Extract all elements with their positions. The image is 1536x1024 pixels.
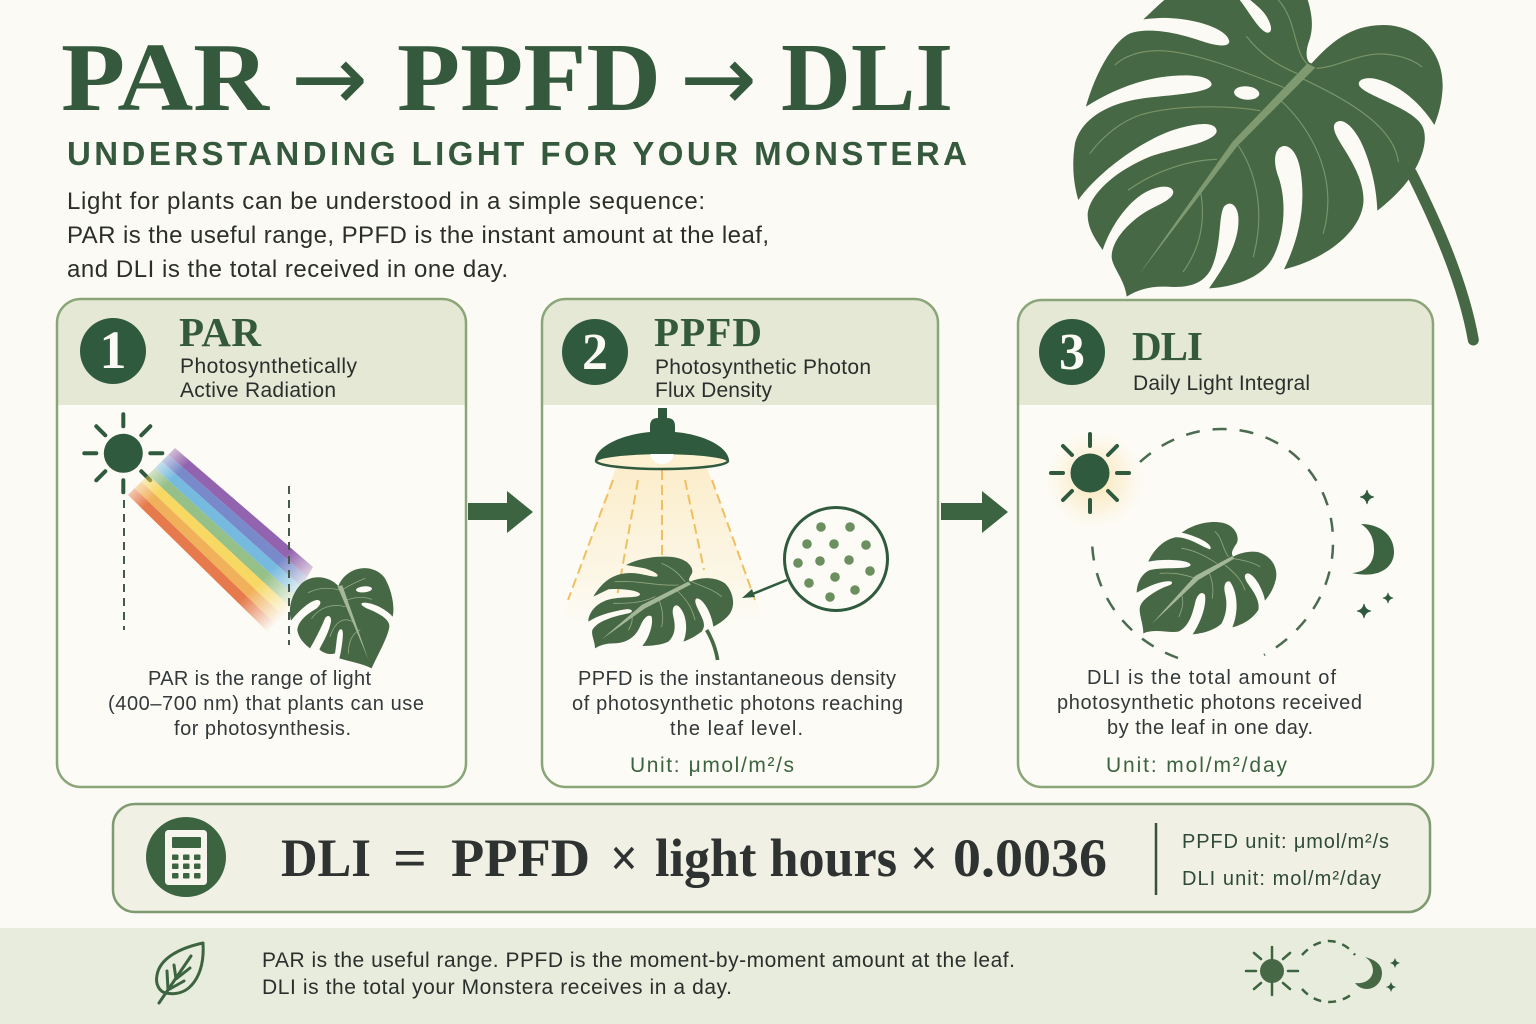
PAR full name: Active Radiation (180, 379, 336, 402)
PPFD full name: Photosynthetic Photon (655, 356, 871, 379)
icon: day-night cycle (1246, 941, 1400, 1002)
divider (1155, 823, 1157, 895)
PAR full name (180, 355, 358, 402)
icon: leaf with stem (588, 557, 733, 660)
PPFD description: of photosynthetic photons reaching (572, 693, 903, 715)
PPFD description: the leaf level. (670, 718, 803, 740)
formula text: = (393, 828, 427, 888)
formula text: light hours (655, 828, 897, 888)
intro text (67, 188, 769, 283)
DLI description: photosynthetic photons received (1057, 692, 1362, 714)
badge 3: 3 (1059, 324, 1085, 381)
callout arrow (742, 580, 787, 598)
title: PAR (61, 24, 270, 131)
PPFD header band (542, 299, 938, 405)
title: DLI (781, 24, 953, 131)
PPFD unit: Unit: μmol/m²/s (630, 754, 794, 777)
icon: outline leaf (157, 943, 203, 1003)
DLI header band (1018, 300, 1433, 405)
formula text: 0.0036 (953, 828, 1107, 888)
icon: sun (84, 414, 162, 492)
PAR description (108, 668, 424, 740)
formula text: × (610, 828, 638, 888)
arrow 2 (941, 491, 1008, 533)
footer text: DLI is the total your Monstera receives in a day. (262, 976, 732, 999)
panel: formula (113, 804, 1430, 912)
DLI description (1057, 667, 1362, 739)
light rays (568, 470, 755, 600)
icon: leaf (290, 568, 393, 668)
badge 1 (80, 318, 146, 384)
badge 2: 2 (582, 324, 608, 381)
PAR full name: Photosynthetically (180, 355, 358, 378)
icon: leaf (1137, 522, 1276, 634)
formula text (281, 828, 1107, 888)
PPFD description (572, 668, 903, 740)
sun glow (1045, 430, 1145, 530)
PPFD description: PPFD is the instantaneous density (578, 668, 896, 690)
DLI full name: Daily Light Integral (1133, 372, 1310, 395)
PAR header band (57, 299, 466, 405)
PPFD full name (655, 356, 871, 402)
footer band (0, 928, 1536, 1024)
formula text: × (910, 828, 938, 888)
title: PPFD (397, 24, 661, 131)
icon: moon (1352, 524, 1394, 575)
title: → (680, 25, 757, 132)
title: → (291, 25, 368, 132)
DLI description: by the leaf in one day. (1107, 717, 1313, 739)
unit notes: DLI unit: mol/m²/day (1182, 868, 1381, 890)
PAR description: for photosynthesis. (174, 718, 351, 740)
footer text: PAR is the useful range. PPFD is the moment-by-moment amount at the leaf. (262, 949, 1015, 972)
PPFD full name: Flux Density (655, 379, 772, 402)
magnified photons (784, 508, 888, 610)
DLI unit: Unit: mol/m²/day (1106, 754, 1288, 777)
intro text: and DLI is the total received in one day. (67, 256, 508, 283)
intro text: PAR is the useful range, PPFD is the instant amount at the leaf, (67, 222, 769, 249)
icon: sun (1051, 434, 1129, 512)
panel: DLI (1018, 300, 1433, 787)
DLI heading: DLI (1132, 323, 1203, 369)
rainbow spectrum beam (128, 448, 313, 637)
PPFD heading: PPFD (654, 309, 762, 355)
PAR heading: PAR (179, 309, 261, 355)
badge 2 (562, 319, 628, 385)
PAR description: PAR is the range of light (148, 668, 371, 690)
subtitle: UNDERSTANDING LIGHT FOR YOUR MONSTERA (67, 135, 967, 172)
range markers (124, 486, 289, 645)
daily path (1092, 429, 1333, 658)
formula text: PPFD (451, 828, 590, 888)
formula text: DLI (281, 828, 371, 888)
PAR description: (400–700 nm) that plants can use (108, 693, 424, 715)
icon: lamp (595, 408, 729, 469)
panel: PPFD (542, 299, 938, 787)
arrow 1 (468, 491, 533, 533)
unit notes: PPFD unit: μmol/m²/s (1182, 831, 1389, 853)
icon: calculator (146, 817, 226, 897)
hero monstera leaf (1073, 0, 1473, 340)
badge 3 (1039, 319, 1105, 385)
panel: PAR (57, 299, 466, 787)
footer text (262, 949, 1015, 999)
unit notes (1182, 831, 1389, 890)
icon: stars (1357, 490, 1393, 618)
title (61, 24, 953, 132)
DLI description: DLI is the total amount of (1087, 667, 1336, 689)
light cone (560, 462, 765, 625)
badge 1: 1 (100, 320, 126, 380)
intro text: Light for plants can be understood in a simple sequence: (67, 188, 705, 215)
